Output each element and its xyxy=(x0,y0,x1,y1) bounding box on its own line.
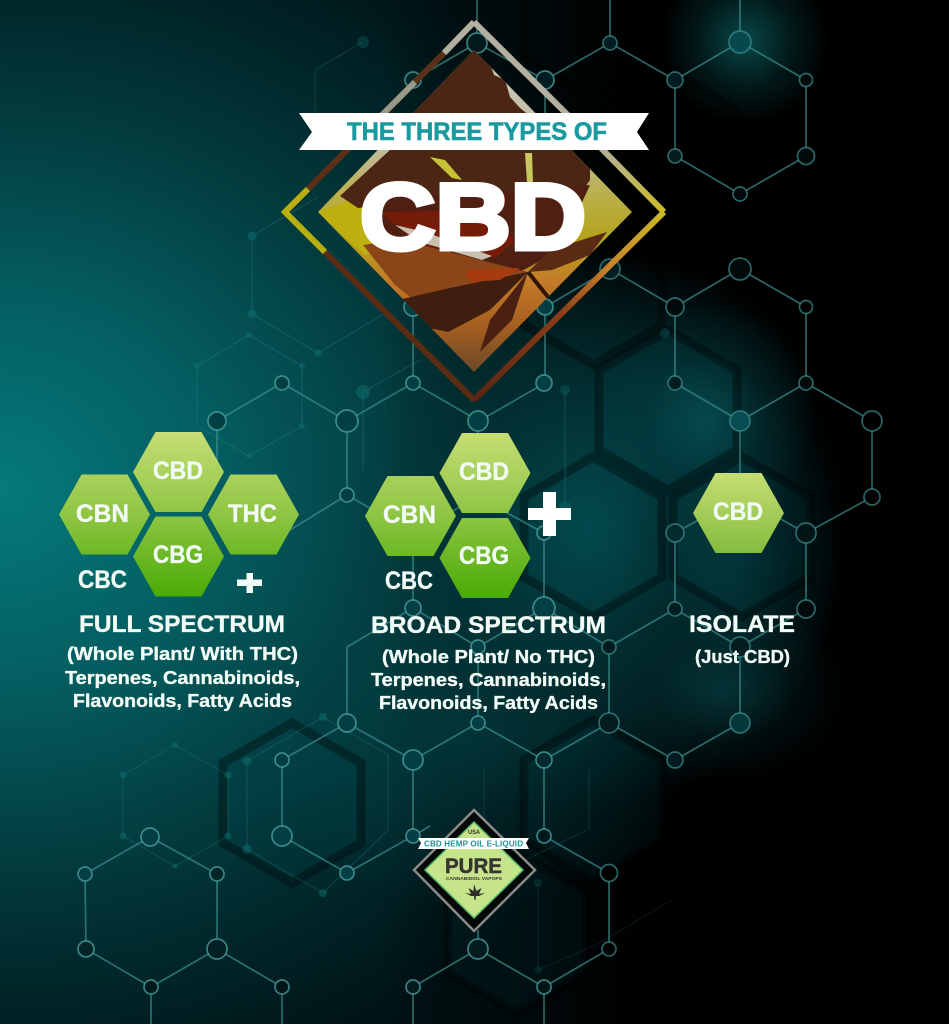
plus sign: full spectrum xyxy=(237,573,262,593)
network nodes on teal xyxy=(78,33,555,994)
network nodes on dark xyxy=(599,31,882,956)
cannabis leaf photo diamond xyxy=(318,45,632,372)
logo PURE wordmark: PURE xyxy=(445,855,502,878)
dark honeycomb background xyxy=(223,0,811,1013)
description: full spectrum: Flavonoids, Fatty Acids xyxy=(73,691,292,711)
logo tagline: CANNABIDIOL VAPOPS xyxy=(446,876,502,881)
panel: broad spectrum xyxy=(365,433,606,713)
logo USA text: USA xyxy=(468,829,480,836)
logo outer diamond xyxy=(414,810,535,931)
description: isolate: (Just CBD) xyxy=(695,647,790,667)
hexagon: isolate xyxy=(693,473,784,553)
cannabinoid labels: full spectrum: CBC xyxy=(78,566,127,594)
panel: full spectrum xyxy=(59,432,300,711)
cannabinoid labels: broad spectrum: CBG xyxy=(459,542,509,570)
logo banner text: CBD HEMP OIL E-LIQUID xyxy=(424,840,523,848)
hexagon cluster: broad spectrum xyxy=(365,433,530,598)
heading: isolate: ISOLATE xyxy=(689,611,795,638)
cannabinoid labels: full spectrum xyxy=(76,457,277,594)
cannabinoid labels: broad spectrum: CBN xyxy=(383,501,436,529)
faint hexagon network xyxy=(123,42,672,970)
logo leaf icon xyxy=(465,884,485,900)
faint network nodes xyxy=(120,36,670,974)
outer diamond frame xyxy=(285,22,664,400)
plus sign: broad spectrum xyxy=(528,492,571,536)
cannabinoid labels: broad spectrum: CBC xyxy=(385,567,433,595)
panel: isolate xyxy=(689,473,795,667)
description: broad spectrum xyxy=(371,647,606,713)
logo green diamond xyxy=(425,822,523,918)
cannabinoid labels: broad spectrum: CBD xyxy=(459,458,509,486)
banner xyxy=(299,113,649,150)
banner title text: THE THREE TYPES OF xyxy=(347,118,607,146)
title diamond emblem xyxy=(285,22,664,400)
cannabinoid labels: full spectrum: CBG xyxy=(153,541,203,569)
cannabinoid labels: broad spectrum xyxy=(383,458,509,595)
logo: Pure Cannabidiol Vapors xyxy=(414,810,535,931)
CBD headline: CBD xyxy=(360,164,586,269)
description: full spectrum: Terpenes, Cannabinoids, xyxy=(65,668,300,688)
heading: full spectrum: FULL SPECTRUM xyxy=(79,611,285,638)
description: broad spectrum: (Whole Plant/ No THC) xyxy=(382,647,595,667)
logo banner xyxy=(418,838,529,849)
description: full spectrum: (Whole Plant/ With THC) xyxy=(67,644,298,664)
cannabinoid labels: full spectrum: CBN xyxy=(76,500,129,528)
cannabinoid labels: full spectrum: THC xyxy=(228,500,277,528)
description: full spectrum xyxy=(65,644,300,711)
cannabinoid label: isolate: CBD xyxy=(713,498,763,526)
hexagon cluster: full spectrum xyxy=(59,432,299,596)
description: broad spectrum: Terpenes, Cannabinoids, xyxy=(371,670,606,690)
description: broad spectrum: Flavonoids, Fatty Acids xyxy=(379,693,598,713)
heading: broad spectrum: BROAD SPECTRUM xyxy=(371,612,606,639)
cannabinoid labels: full spectrum: CBD xyxy=(153,457,203,485)
